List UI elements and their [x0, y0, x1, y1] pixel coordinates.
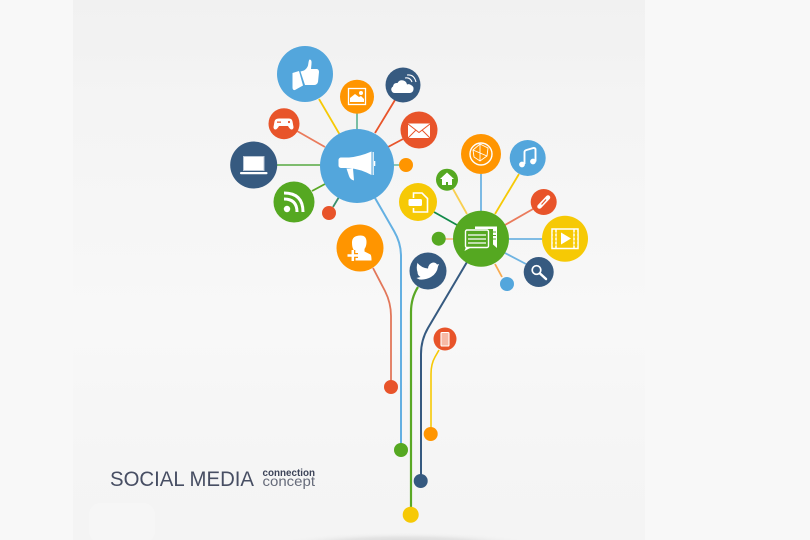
icon: picture — [340, 80, 374, 114]
icon: cloud — [386, 68, 420, 102]
icon: document — [399, 183, 437, 221]
ground shadow — [270, 532, 540, 540]
connector lines — [277, 99, 542, 515]
icon: search — [524, 257, 554, 287]
icon: home — [436, 169, 458, 191]
icon: envelope — [400, 112, 438, 148]
icon: rss — [274, 182, 314, 222]
title: SOCIAL MEDIA — [110, 467, 255, 491]
icon: thumbs up — [277, 46, 333, 102]
icon: gamepad — [268, 108, 300, 139]
icon: music note — [510, 140, 546, 176]
icon: link — [531, 189, 557, 215]
title: concept — [262, 473, 315, 489]
title: connection — [262, 468, 315, 479]
icon: add user — [336, 224, 384, 272]
icon: megaphone hub — [320, 129, 394, 203]
icon: twitter bird — [410, 252, 446, 290]
small dots — [322, 158, 514, 523]
icon: laptop — [230, 142, 277, 188]
icon: chat hub — [453, 211, 509, 267]
icon: smartphone — [434, 328, 456, 350]
icon: globe — [461, 134, 501, 174]
icon: video — [542, 216, 588, 262]
